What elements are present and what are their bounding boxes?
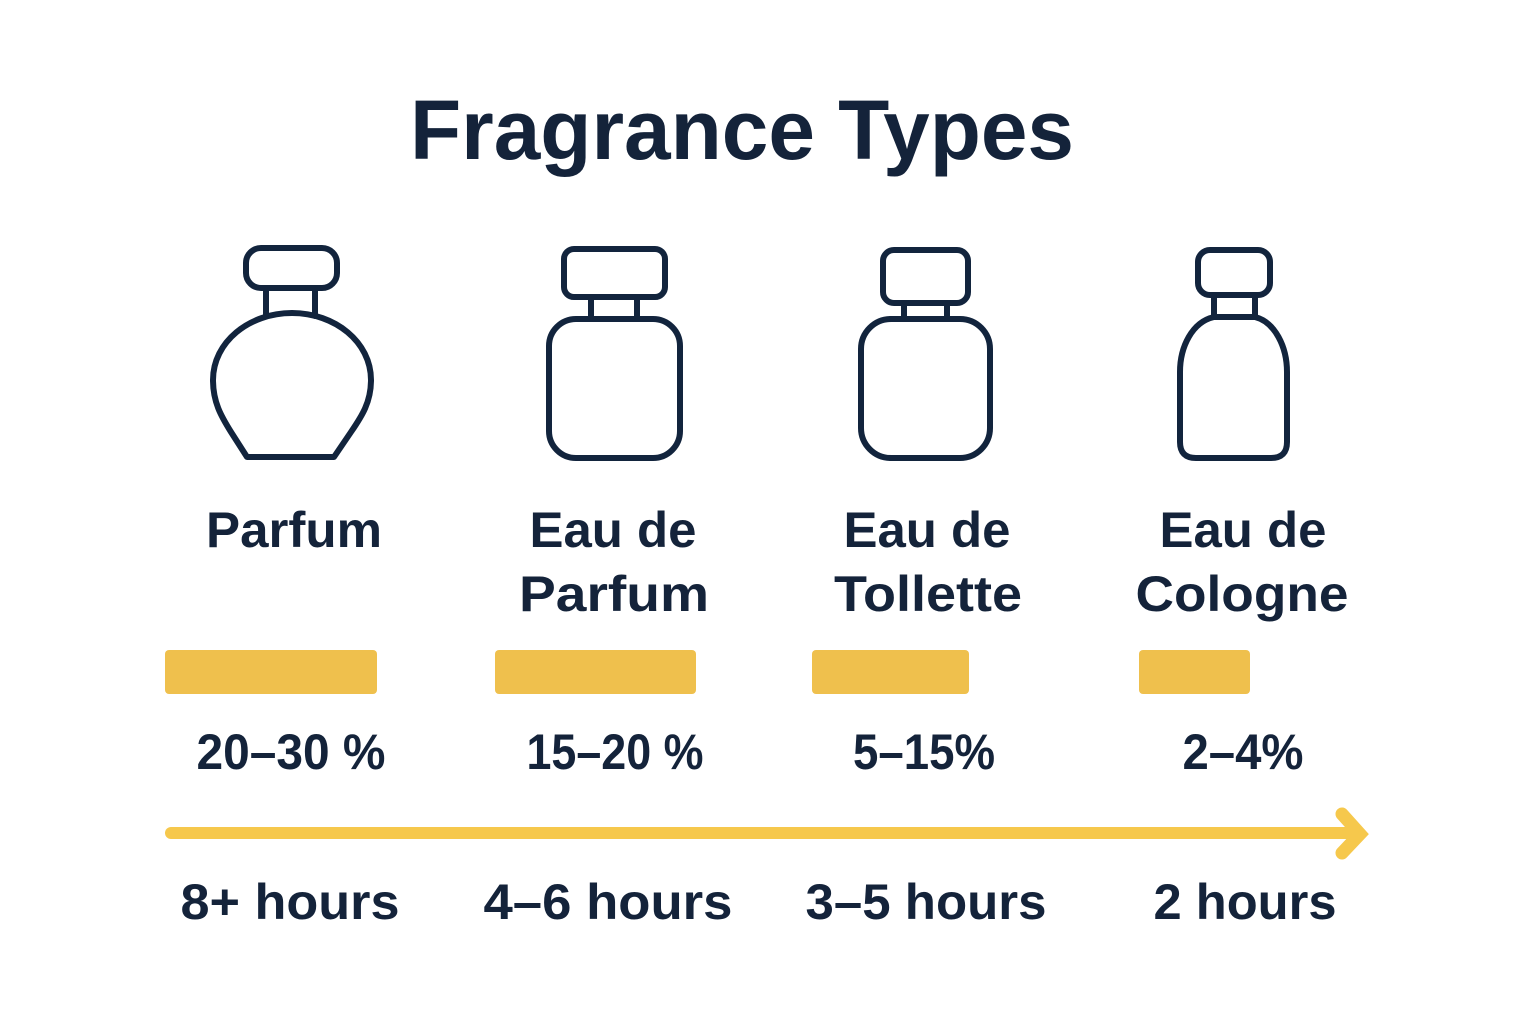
icon: eau de parfum bottle	[549, 249, 680, 458]
title: Fragrance Types	[410, 83, 1074, 177]
value: 5-15%: 5–15%	[853, 724, 995, 780]
value: 2-4%: 2–4%	[1182, 724, 1304, 780]
label: Eau de Parfum: Parfum	[519, 566, 709, 622]
arrow: longevity timeline	[171, 814, 1360, 853]
duration: 8+ hours: 8+ hours	[180, 874, 400, 930]
icon: eau de toilette bottle	[861, 250, 990, 458]
label: Eau de Tollette	[834, 502, 1022, 622]
duration: 4-6 hours: 4–6 hours	[484, 874, 732, 930]
bar: eau de toilette concentration	[812, 650, 969, 694]
label: Eau de Cologne	[1136, 502, 1348, 622]
bar: parfum concentration	[165, 650, 377, 694]
label: Eau de Parfum: Eau de	[530, 502, 696, 558]
label: Parfum: Parfum	[206, 502, 382, 558]
label: Eau de Tollette: Tollette	[834, 566, 1022, 622]
label: Eau de Tollette: Eau de	[844, 502, 1010, 558]
label: Eau de Cologne: Eau de	[1160, 502, 1326, 558]
label: Eau de Cologne: Cologne	[1136, 566, 1348, 622]
value: 20-30%: 20–30 %	[196, 724, 386, 780]
duration: 2 hours: 2 hours	[1154, 874, 1336, 930]
bar: eau de parfum concentration	[495, 650, 696, 694]
icon: eau de cologne bottle	[1180, 250, 1287, 458]
label: Eau de Parfum	[519, 502, 709, 622]
duration: 3-5 hours: 3–5 hours	[806, 874, 1046, 930]
bar: eau de cologne concentration	[1139, 650, 1250, 694]
value: 15-20%: 15–20 %	[526, 724, 704, 780]
icon: parfum bottle	[213, 248, 371, 457]
